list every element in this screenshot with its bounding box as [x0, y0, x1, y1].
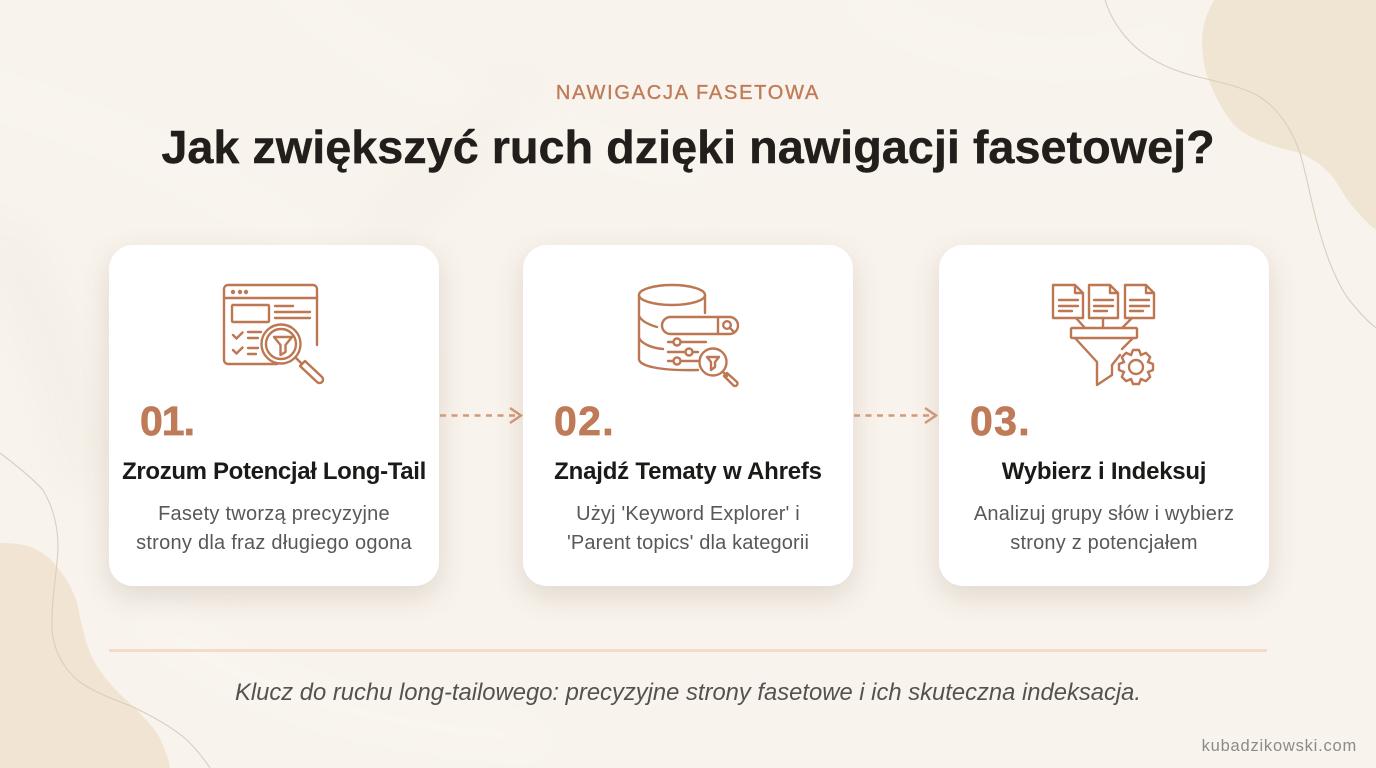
title: Jak zwiększyć ruch dzięki nawigacji fasetowej? — [161, 121, 1215, 173]
card description — [974, 503, 1234, 554]
divider line — [109, 649, 1267, 652]
card heading: Zrozum Potencjał Long-Tail — [122, 458, 426, 485]
arrow: step 2 to 3 — [854, 407, 938, 424]
card heading: Wybierz i Indeksuj — [1002, 458, 1206, 485]
eyebrow heading: NAWIGACJA FASETOWA — [556, 82, 820, 104]
watermark: kubadzikowski.com — [1202, 737, 1357, 755]
number: 01. — [140, 398, 194, 444]
card description: Analizuj grupy słów i wybierz — [974, 503, 1234, 525]
panel: step 1 — [109, 245, 439, 586]
panel: step 2 — [523, 245, 853, 586]
arrow: step 1 to 2 — [440, 407, 523, 424]
card heading: Znajdź Tematy w Ahrefs — [554, 458, 822, 485]
card description: 'Parent topics' dla kategorii — [567, 532, 809, 554]
number: 02. — [554, 398, 615, 444]
icon: documents into funnel with gear — [1052, 284, 1156, 386]
number: 03. — [970, 398, 1031, 444]
panel: step 3 — [939, 245, 1269, 586]
card description: Użyj 'Keyword Explorer' i — [576, 503, 800, 525]
card description: strony z potencjałem — [1010, 532, 1198, 554]
icon: browser window with filter magnifier — [222, 284, 324, 384]
card description — [136, 503, 412, 554]
closing statement: Klucz do ruchu long-tailowego: precyzyjne strony fasetowe i ich skuteczna indeksacja. — [235, 679, 1141, 706]
card description — [567, 503, 809, 554]
icon: database with search bar, sliders and filter — [638, 284, 740, 388]
card description: Fasety tworzą precyzyjne — [158, 503, 390, 525]
card description: strony dla fraz długiego ogona — [136, 532, 412, 554]
